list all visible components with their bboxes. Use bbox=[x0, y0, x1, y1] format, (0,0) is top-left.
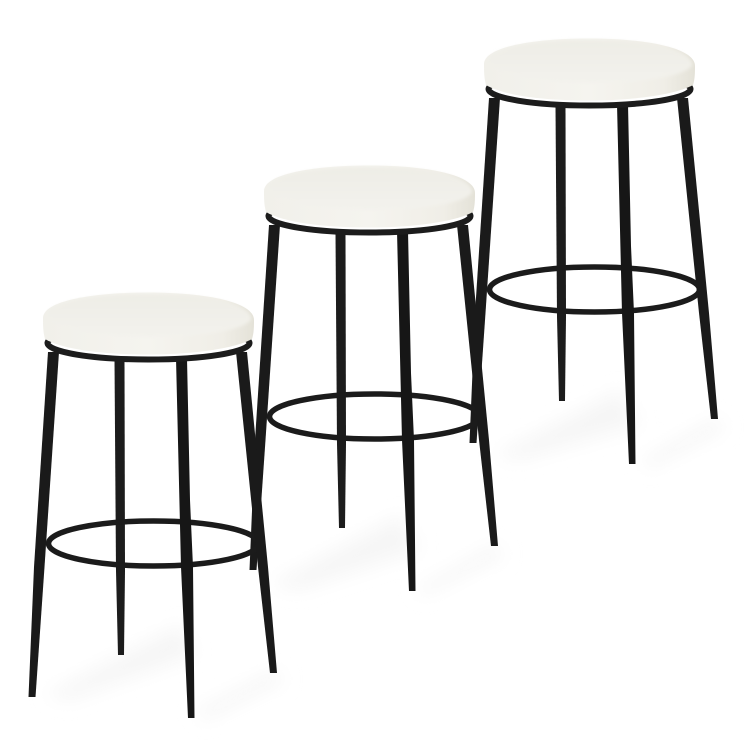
foot ring bbox=[48, 521, 258, 566]
left leg bbox=[250, 225, 280, 570]
right leg bbox=[457, 225, 498, 546]
front leg bbox=[176, 358, 194, 718]
right leg bbox=[236, 352, 277, 673]
stool 2 (middle) bbox=[250, 166, 498, 591]
left leg bbox=[470, 98, 500, 443]
front leg bbox=[617, 104, 636, 464]
back leg bbox=[114, 360, 125, 655]
right leg bbox=[677, 98, 718, 419]
stool 3 (rear) bbox=[470, 38, 718, 464]
back leg bbox=[336, 233, 346, 528]
foot ring bbox=[490, 267, 700, 312]
cushion bbox=[43, 292, 254, 354]
front leg bbox=[397, 231, 416, 591]
back leg bbox=[556, 106, 566, 401]
cushion bbox=[264, 166, 475, 228]
foot ring bbox=[270, 394, 480, 439]
seat ring bbox=[268, 200, 470, 232]
left leg bbox=[28, 352, 59, 697]
seat ring bbox=[488, 72, 690, 106]
floor shadows bbox=[45, 390, 726, 720]
seat ring bbox=[48, 326, 250, 360]
stool 1 (front) bbox=[28, 292, 277, 718]
cushion bbox=[484, 38, 695, 100]
